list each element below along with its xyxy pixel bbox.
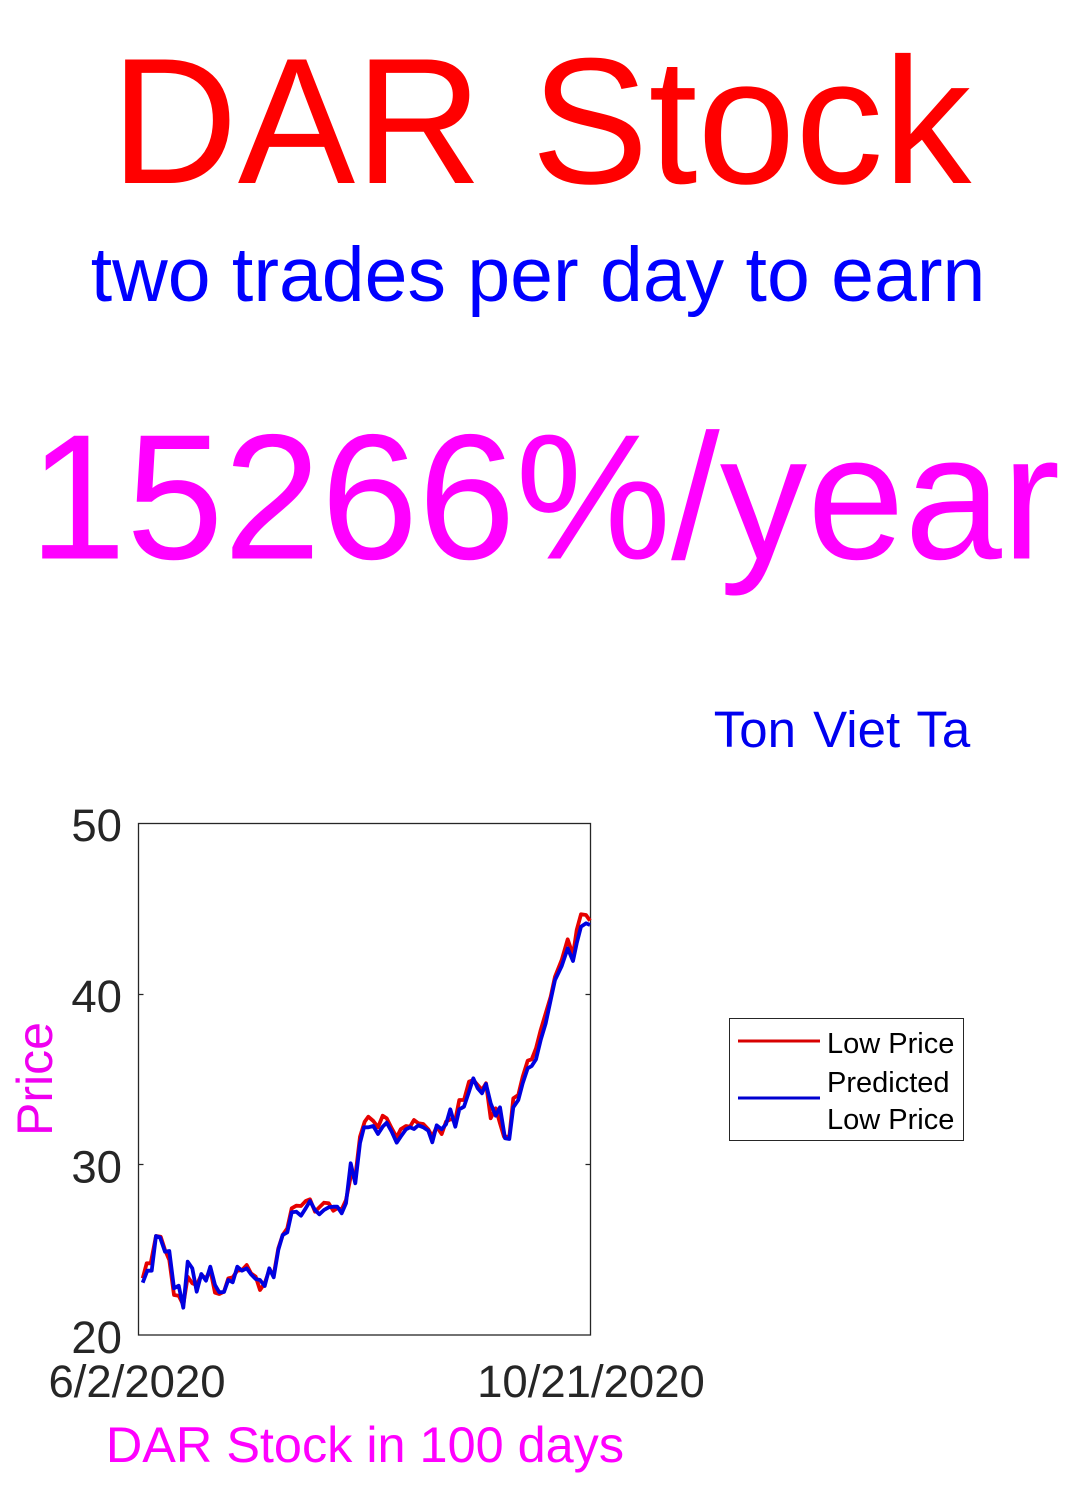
x axis tick labels: 6/2/2020 (48, 1356, 226, 1407)
x axis title: DAR Stock in 100 days (106, 1416, 624, 1473)
y axis title: Price (7, 1022, 63, 1136)
y axis tick labels: 40 (71, 971, 122, 1022)
x axis tick labels: 10/21/2020 (477, 1356, 705, 1407)
predicted low price line (143, 923, 590, 1308)
title: DAR Stock (111, 20, 972, 221)
plot frame and ticks (138, 824, 590, 1335)
legend (730, 1018, 964, 1140)
line chart (7, 800, 705, 1473)
subtitle: two trades per day to earn (91, 232, 985, 318)
legend entry: predicted low price: Predicted (827, 1067, 950, 1099)
y axis tick labels (71, 800, 122, 1363)
headline return figure: 15266%/year (29, 398, 1060, 597)
x axis tick labels (48, 1356, 705, 1407)
low price line (143, 914, 590, 1305)
y axis tick labels: 30 (71, 1142, 122, 1192)
legend entry: predicted low price: Low Price (827, 1104, 954, 1136)
legend entry: low price: Low Price (827, 1028, 954, 1060)
y axis tick labels: 50 (71, 800, 122, 851)
legend entry: predicted low price (738, 1067, 954, 1136)
y axis tick labels: 20 (71, 1312, 122, 1363)
author: Ton Viet Ta (714, 701, 971, 758)
